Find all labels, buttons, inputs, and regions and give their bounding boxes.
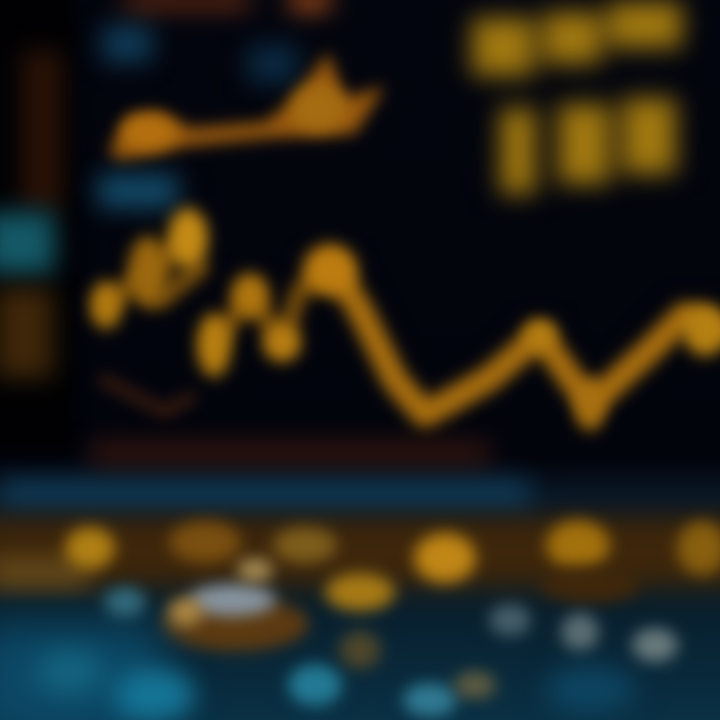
upper area chart <box>108 52 385 160</box>
blue lower coins <box>0 587 678 720</box>
panel: dark left column <box>0 0 75 450</box>
coins row <box>0 520 720 651</box>
faint blue labels <box>98 0 330 208</box>
baseline glow <box>0 442 530 508</box>
main line chart <box>90 208 720 431</box>
blurred headline figures <box>472 2 682 194</box>
